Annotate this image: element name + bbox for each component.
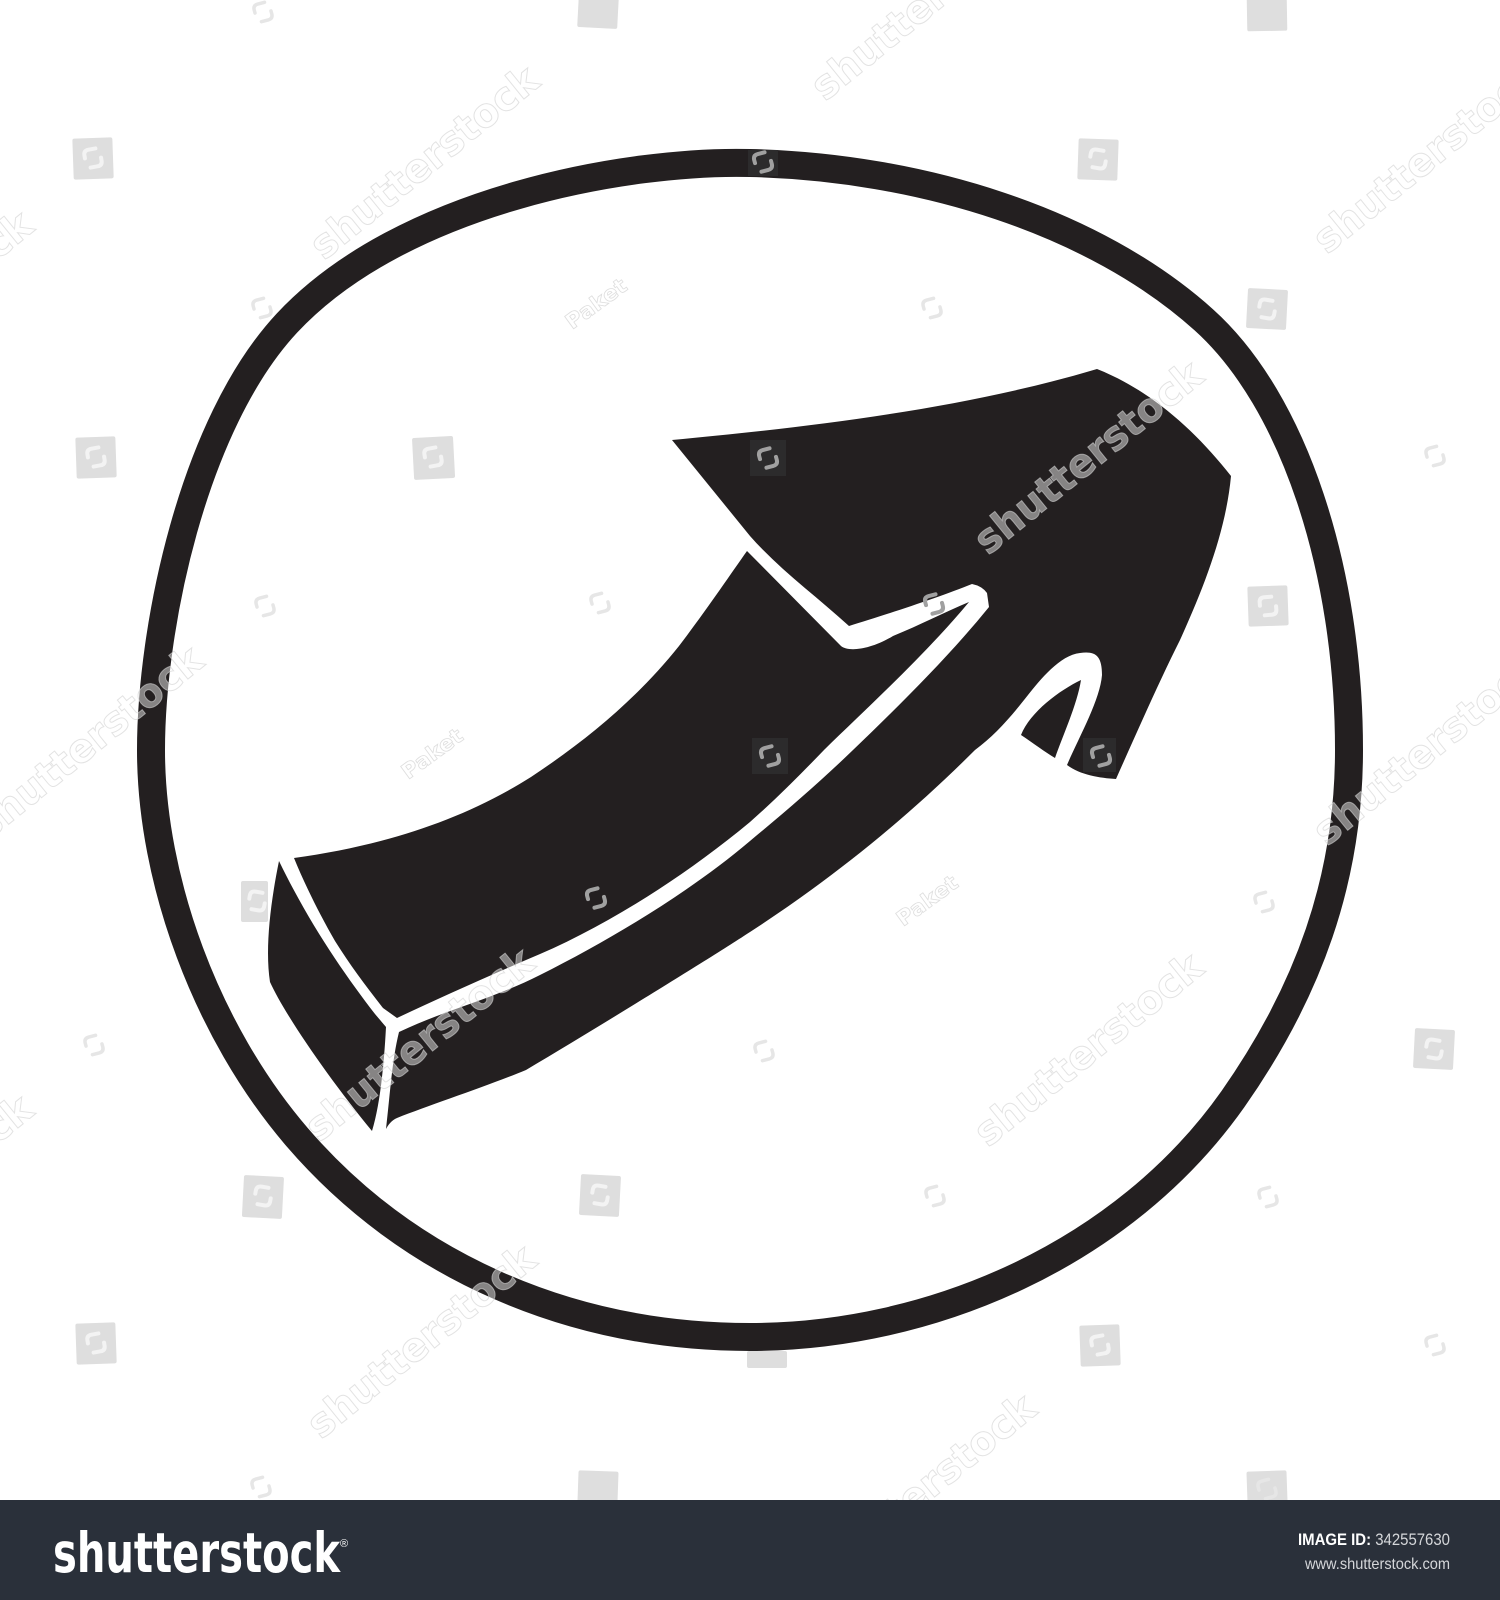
stock watermark logos: shutterstock <box>965 351 1213 564</box>
stock watermark logos: shutterstock <box>965 943 1213 1156</box>
arrow head and lower side of shaft <box>386 369 1231 1129</box>
footer logo: shutterstock <box>53 1521 341 1585</box>
stock watermark logos: shutterstock <box>296 938 544 1151</box>
panel: footer bar <box>0 1500 1500 1600</box>
tail end face <box>268 861 386 1131</box>
icon: rising 3D arrow <box>268 369 1231 1131</box>
stock watermark logos: Paket <box>397 723 468 784</box>
icon: hand-drawn circle ring <box>151 163 1349 1337</box>
stock watermark logos: Paket <box>892 870 963 931</box>
website address: www.shutterstock.com <box>1304 1556 1450 1573</box>
image id: IMAGE ID: 342557630 <box>1298 1530 1450 1549</box>
top face of shaft <box>294 551 969 1018</box>
stock watermark logos: Paket <box>561 273 632 334</box>
stock watermark logos: shutterstock <box>298 1235 546 1448</box>
barb inner wedge <box>1021 680 1081 758</box>
stock watermark logos: shutterstock <box>798 1384 1046 1597</box>
registered mark: ® <box>340 1538 348 1550</box>
stock watermark logos: shutterstock <box>301 56 549 269</box>
